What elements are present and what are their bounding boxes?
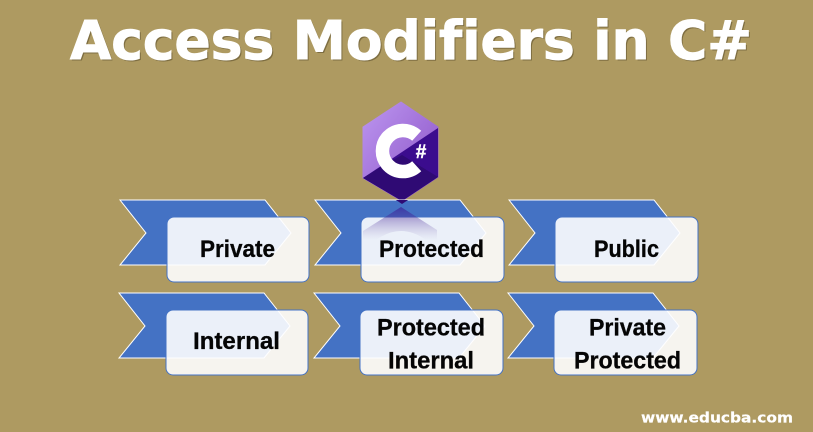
card: Private Protected (554, 310, 697, 375)
card: Public: Public (594, 236, 659, 263)
card: Private: Private (200, 236, 275, 263)
card: Private Protected: Private (589, 314, 666, 342)
icon: C# logo: # (416, 142, 427, 163)
card: Public (555, 217, 698, 282)
title: Access Modifiers in C# (70, 9, 752, 72)
card: Internal (166, 310, 308, 375)
panel: chevron row 2 column 2 (314, 293, 485, 358)
card: Internal: Internal (193, 328, 280, 355)
panel: chevron row 2 column 1 (119, 293, 290, 358)
panel: chevron row 1 column 3 (509, 200, 680, 265)
icon: C# logo (363, 102, 438, 201)
card: Protected (361, 217, 504, 282)
card: Protected: Protected (379, 236, 484, 263)
panel: chevron row 1 column 1 (120, 200, 291, 265)
card: Protected Internal: Protected (377, 314, 485, 342)
website credit: www.educba.com (641, 410, 793, 426)
title: Access Modifiers in C# (72, 10, 754, 74)
panel: chevron row 2 column 3 (508, 293, 679, 358)
card: Private Protected: Protected (574, 348, 681, 374)
panel: chevron row 1 column 2 (315, 200, 486, 265)
icon: logo reflection (363, 207, 437, 240)
card: Protected Internal (360, 310, 503, 375)
card: Private (167, 217, 309, 282)
icon: logo tip under hexagon (396, 200, 408, 204)
card: Protected Internal: Internal (388, 348, 474, 374)
